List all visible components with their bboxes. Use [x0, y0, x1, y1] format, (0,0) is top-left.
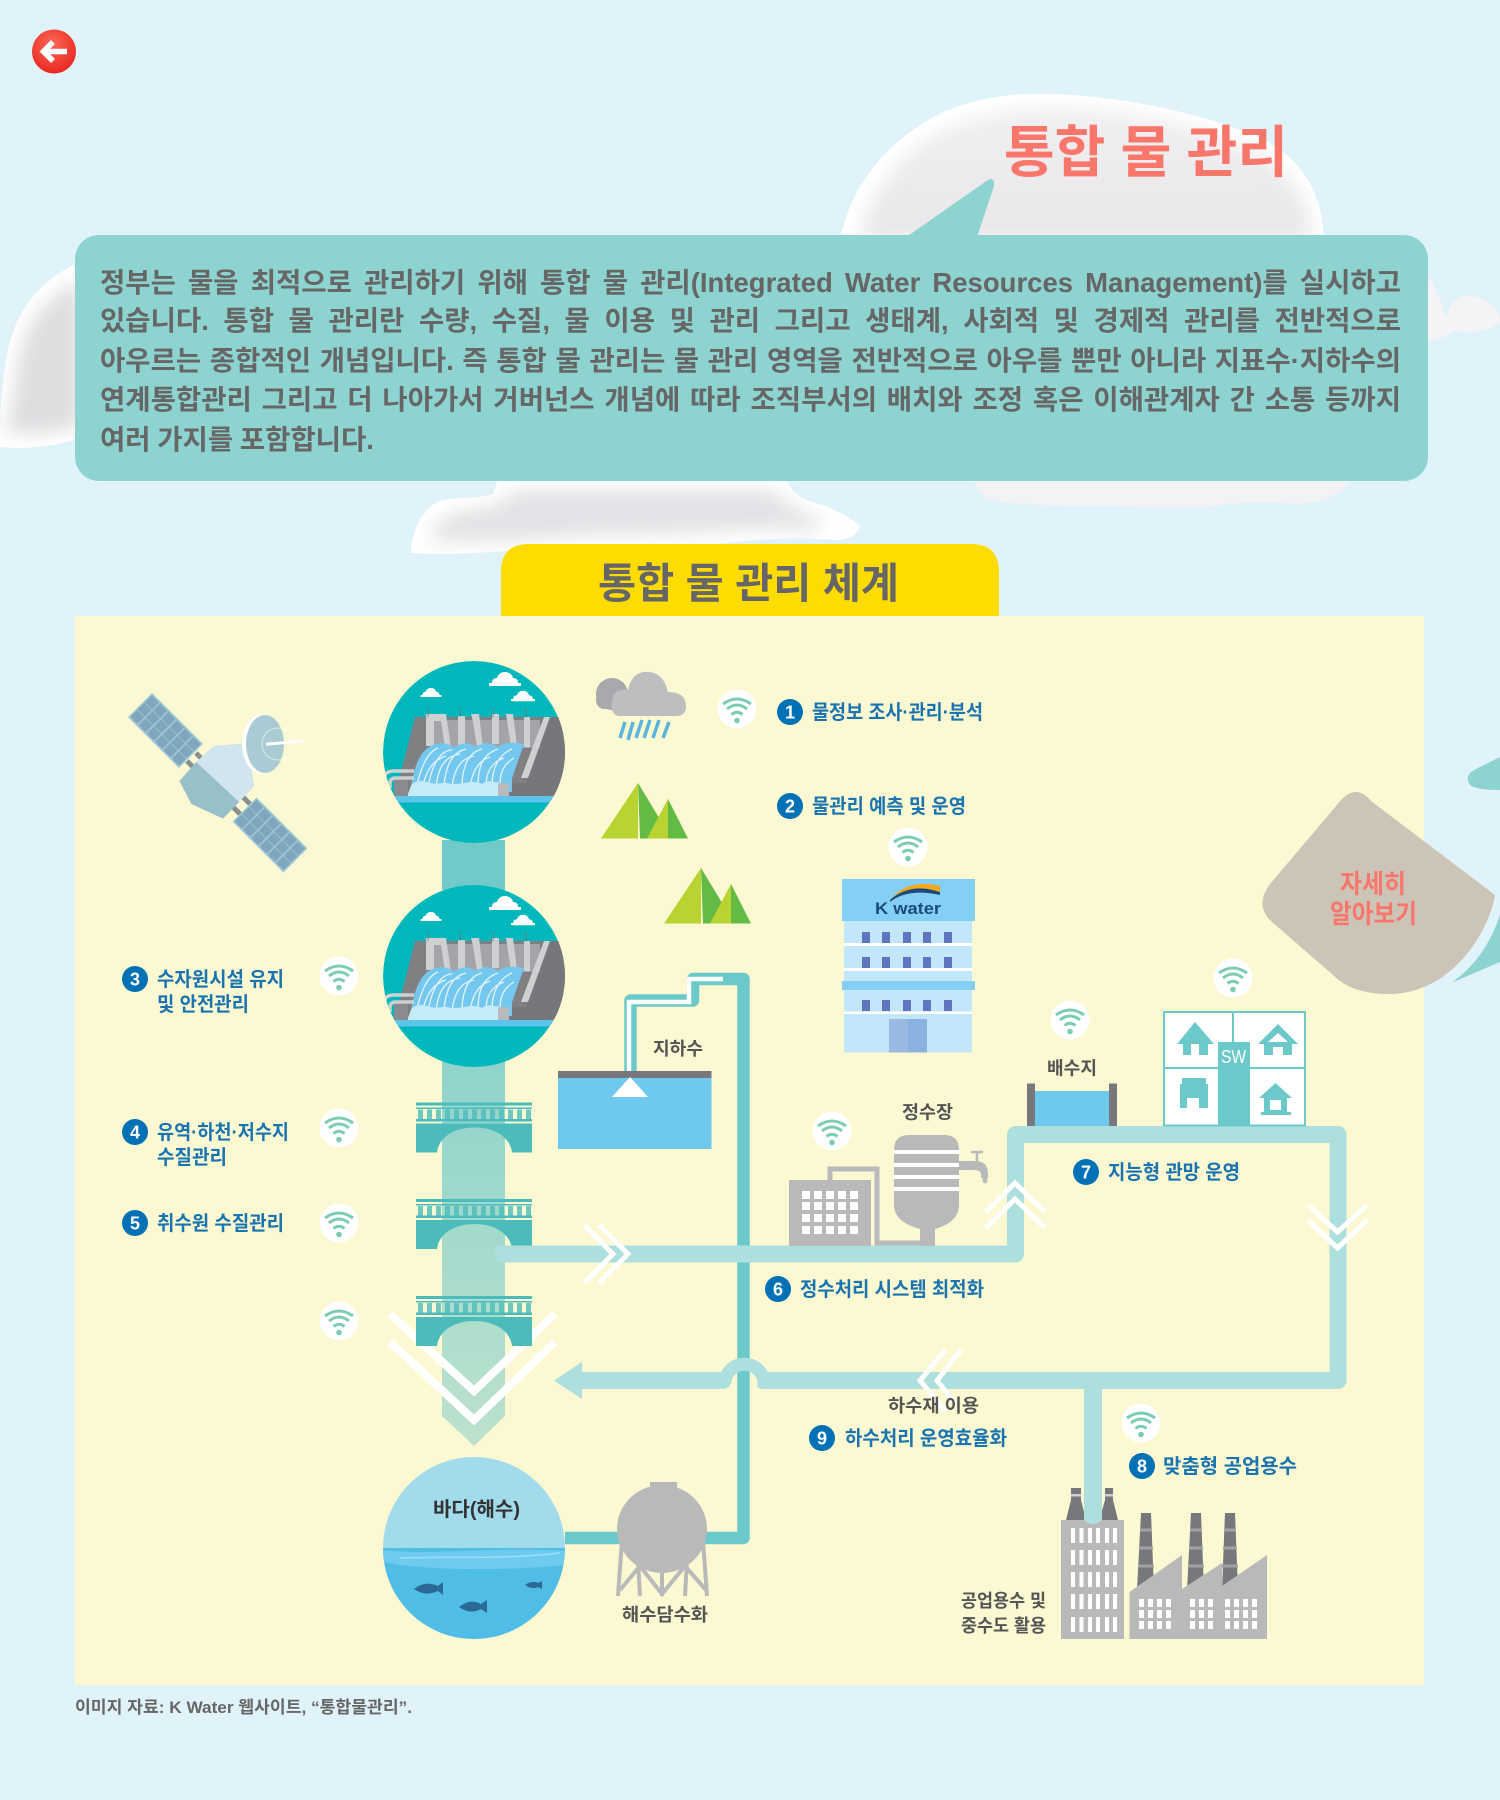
intro paragraph — [100, 267, 1401, 455]
icon: K-water building — [842, 879, 975, 1052]
label 4: 유역·하천·저수지 — [157, 1121, 289, 1144]
cloud: left — [0, 262, 80, 448]
chevrons: flow arrows — [584, 1183, 1367, 1411]
icon: houses — [1164, 1012, 1305, 1126]
central column — [442, 840, 505, 1446]
tab: system heading — [501, 544, 999, 618]
icon: reservoir — [1027, 1084, 1117, 1126]
label 6: 6 — [773, 1280, 783, 1300]
label: desalination: 해수담수화 — [622, 1605, 708, 1625]
wifi icon 2 — [888, 828, 928, 866]
label 9: 9 — [817, 1428, 827, 1448]
icon: desalination tank — [617, 1482, 707, 1596]
panel: diagram background — [75, 616, 1424, 1685]
label 1: 1 — [785, 702, 795, 722]
wifi icon 8 — [1050, 1000, 1090, 1040]
cloud: top right — [840, 94, 1324, 240]
cloud: right — [1424, 270, 1500, 340]
label 9 — [809, 1425, 1007, 1451]
label 8: 맞춤형 공업용수 — [1163, 1455, 1297, 1478]
icon: houses: SW — [1221, 1047, 1246, 1067]
wifi icon 6 — [320, 1302, 358, 1340]
label 2: 물관리 예측 및 운영 — [812, 795, 966, 818]
icon: factories — [1061, 1380, 1267, 1639]
wifi icon 5 — [320, 1204, 358, 1242]
bridge 1 — [416, 1102, 532, 1152]
label 2: 2 — [785, 796, 795, 816]
cloud: bottom centre — [411, 478, 860, 554]
intro paragraph: 아우르는 종합적인 개념입니다. 즉 통합 물 관리는 물 관리 영역을 전반적으로 아우를 뿐만 아니라 지표수·지하수의 — [100, 345, 1401, 376]
label 7 — [1073, 1159, 1240, 1185]
label 5 — [122, 1210, 284, 1236]
pipe: teal supply — [565, 979, 744, 1538]
label: industrial water: 중수도 활용 — [961, 1616, 1046, 1636]
icon: mountains lower — [664, 868, 751, 924]
label 9: 하수처리 운영효율화 — [845, 1427, 1007, 1450]
label: groundwater: 지하수 — [653, 1039, 703, 1059]
chevrons: down to the sea — [390, 1314, 555, 1420]
sea circle — [383, 1457, 565, 1643]
label 1: 물정보 조사·관리·분석 — [812, 701, 983, 724]
title: 통합 물 관리 — [1004, 121, 1288, 184]
title speech tail — [902, 179, 994, 240]
label 5: 취수원 수질관리 — [157, 1212, 284, 1235]
intro paragraph: 여러 가지를 포함합니다. — [100, 424, 374, 455]
dam: upper — [383, 661, 565, 843]
wifi icon 4 — [320, 1108, 358, 1148]
label 3: 및 안전관리 — [157, 993, 249, 1016]
icon: water treatment plant — [789, 1135, 988, 1246]
dam: lower — [383, 885, 565, 1067]
label 7: 7 — [1081, 1162, 1091, 1182]
label 6 — [765, 1276, 984, 1302]
button: learn more: 알아보기 — [1330, 899, 1417, 929]
sea circle: 바다(해수) — [433, 1498, 520, 1521]
button: learn more: 자세히 — [1340, 869, 1406, 899]
intro paragraph: 정부는 물을 최적으로 관리하기 위해 통합 물 관리(Integrated Water Resources Management)를 실시하고 — [100, 267, 1401, 298]
cloud: bottom right — [974, 478, 1350, 508]
intro panel — [75, 235, 1428, 481]
wifi icon 10 — [1122, 1404, 1160, 1442]
label 4: 수질관리 — [157, 1146, 227, 1169]
label 3: 3 — [130, 970, 140, 990]
label 4: 4 — [130, 1122, 140, 1142]
icon: mountains upper — [601, 783, 688, 838]
label 8: 8 — [1137, 1456, 1147, 1476]
icon: K-water building: K water — [875, 899, 941, 918]
bridge 3 — [416, 1296, 532, 1346]
label: treatment plant: 정수장 — [902, 1102, 953, 1122]
label 8 — [1129, 1453, 1297, 1479]
wifi icon 3 — [320, 956, 358, 996]
wifi icon 1 — [718, 690, 756, 728]
wifi icon 9 — [1214, 958, 1252, 998]
label 3 — [122, 966, 284, 1016]
label: industrial water — [961, 1591, 1046, 1636]
label 4 — [122, 1119, 289, 1169]
tab: system heading: 통합 물 관리 체계 — [598, 560, 899, 607]
pipe: light distribution loop — [502, 1134, 1338, 1520]
source note: 이미지 자료: K Water 웹사이트, “통합물관리”. — [75, 1698, 412, 1717]
label 7: 지능형 관망 운영 — [1108, 1161, 1240, 1184]
back button icon — [32, 30, 76, 74]
label: industrial water: 공업용수 및 — [961, 1591, 1046, 1611]
bridge 2 — [416, 1199, 532, 1249]
icon: rain cloud — [596, 672, 686, 740]
intro paragraph: 있습니다. 통합 물 관리란 수량, 수질, 물 이용 및 관리 그리고 생태계, 사회적 및 경제적 관리를 전반적으로 — [100, 305, 1401, 336]
icon: satellite — [128, 693, 307, 872]
label 3: 수자원시설 유지 — [157, 968, 284, 991]
label: reservoir: 배수지 — [1047, 1058, 1097, 1078]
button: learn more — [1262, 757, 1500, 994]
label 5: 5 — [130, 1214, 140, 1234]
intro paragraph: 연계통합관리 그리고 더 나아가서 거버넌스 개념에 따라 조직부서의 배치와 조정 혹은 이해관계자 간 소통 등까지 — [100, 384, 1401, 415]
wifi icon 7 — [812, 1112, 852, 1150]
label 1 — [777, 699, 983, 725]
icon: groundwater tank — [558, 1071, 712, 1149]
label 2 — [777, 793, 966, 819]
label: sewage reuse: 하수재 이용 — [888, 1396, 979, 1416]
label 6: 정수처리 시스템 최적화 — [800, 1278, 984, 1301]
